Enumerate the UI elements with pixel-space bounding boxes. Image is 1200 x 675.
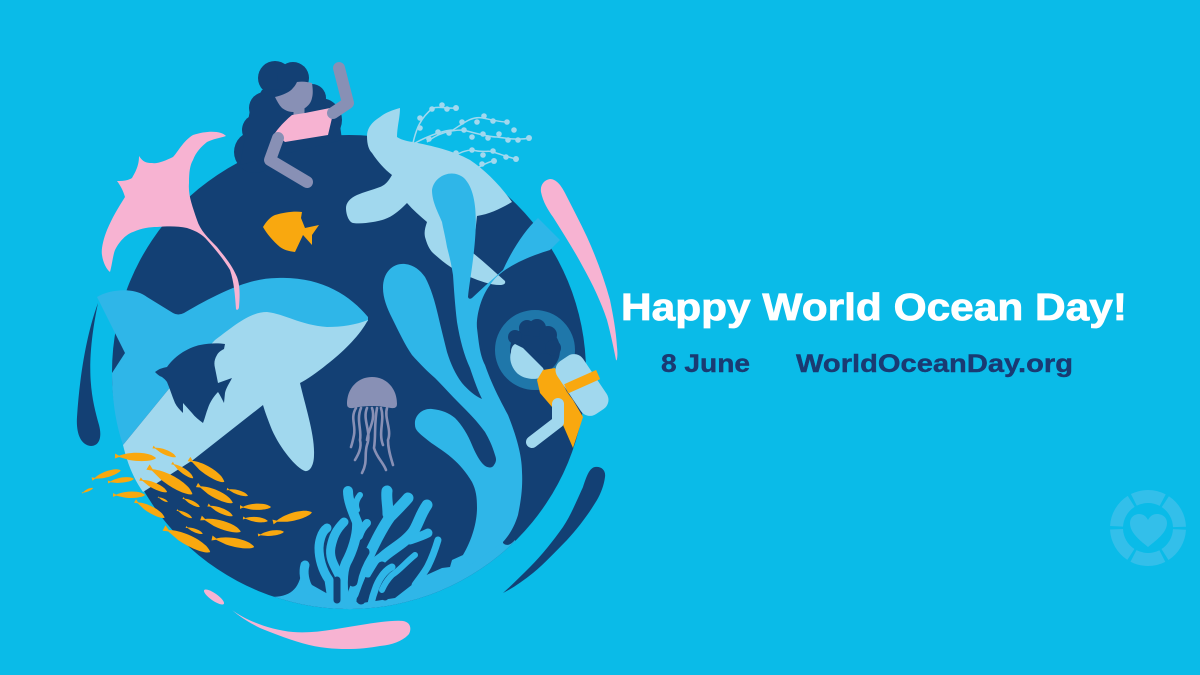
lower right navy swoosh: [503, 467, 605, 593]
right pink swoosh: [541, 179, 617, 360]
logo ring: [1116, 496, 1180, 560]
orange fish: [263, 212, 319, 252]
branching sea plant: [383, 174, 560, 565]
raised arm: [333, 68, 348, 113]
diver hair: [508, 319, 561, 367]
left navy swoosh: [77, 303, 100, 446]
navy globe: [112, 135, 586, 609]
whale belly: [123, 312, 368, 492]
whale upper body: [97, 278, 368, 445]
bottom pink swoosh: [232, 610, 410, 649]
whale: [97, 278, 368, 492]
seaweed sprig: [413, 102, 532, 168]
shirt: [275, 108, 332, 142]
headline: Happy World Ocean Day!: [621, 287, 1127, 329]
face: [275, 82, 313, 112]
website: WorldOceanDay.org: [796, 350, 1073, 378]
seabed band: [274, 540, 516, 609]
coral gaps: [337, 552, 420, 600]
wetsuit: [537, 368, 583, 448]
school of fish: [81, 445, 313, 556]
coral front branches: [371, 555, 415, 604]
helmet ring: [502, 318, 568, 382]
logo heart: [1130, 514, 1167, 547]
air tank: [551, 347, 617, 421]
woman: [234, 61, 348, 182]
diver face: [510, 344, 545, 379]
diver arm: [532, 404, 558, 442]
jellyfish: [347, 377, 397, 473]
angelfish silhouette: [155, 343, 232, 423]
jellyfish tentacles: [351, 408, 393, 473]
coral: [304, 491, 438, 604]
left arm: [270, 138, 307, 182]
jellyfish bell: [347, 377, 397, 408]
date: 8 June: [661, 350, 750, 378]
small pink drop: [202, 587, 226, 607]
neck: [294, 105, 304, 117]
diver: [502, 318, 617, 448]
hair: [234, 61, 342, 173]
illustration: ocean globe: [77, 61, 617, 649]
sea turtle: [346, 108, 512, 285]
logo: ring with heart: [1116, 496, 1180, 560]
manta ray: [102, 132, 240, 310]
